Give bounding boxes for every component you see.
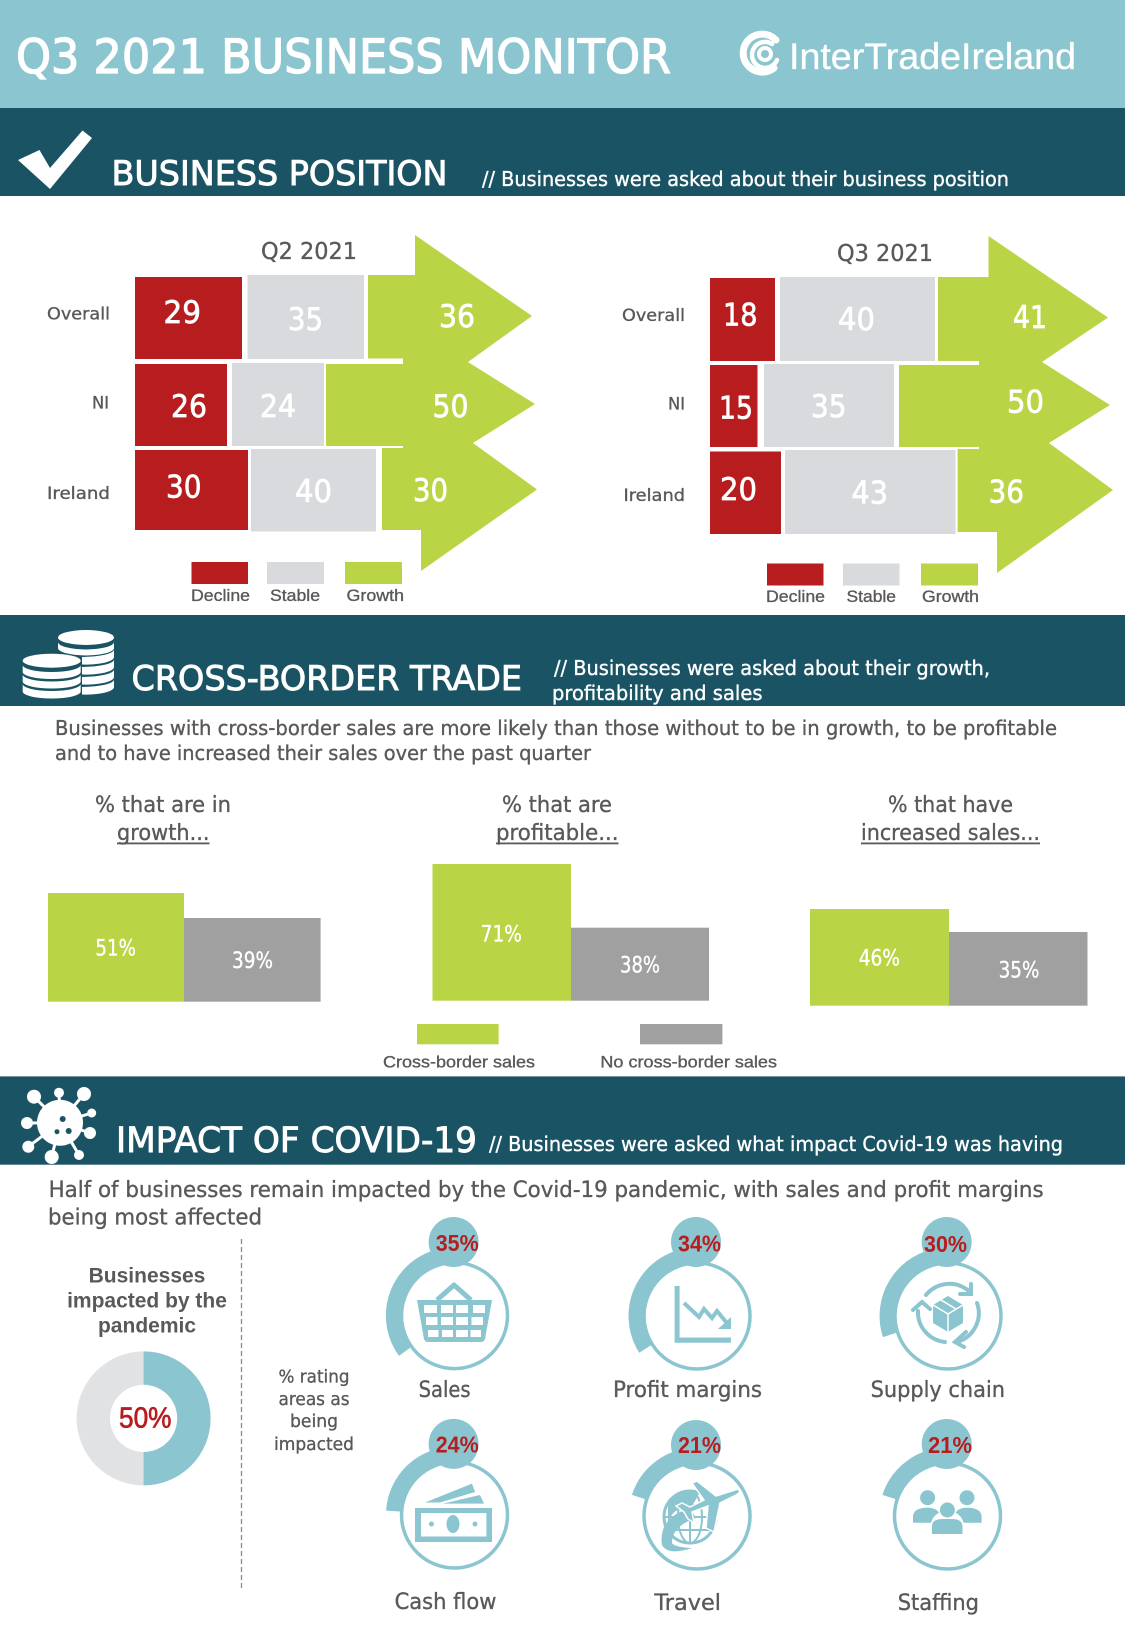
chart: Q3 2021 business position: Overall — [622, 306, 685, 326]
chart: Q2 2021 business position — [47, 235, 537, 571]
donut chart: 50%: 50% — [119, 1403, 172, 1435]
metric: cash flow 24% — [395, 1419, 508, 1615]
bar chart: % in growth: % that are in — [95, 793, 231, 818]
chart: Q2 2021 business position: Ireland — [47, 484, 110, 504]
section band: business position — [0, 108, 1125, 196]
bar chart: % profitable: % that are — [502, 793, 612, 818]
icon: banknotes — [415, 1484, 492, 1542]
chart: Q2 2021 business position: 24 — [260, 389, 296, 425]
donut chart: 50% — [77, 1351, 211, 1485]
header banner — [0, 0, 1125, 108]
heading: business position: BUSINESS POSITION — [112, 154, 448, 194]
text: % rating areas: areas as — [278, 1389, 350, 1410]
title: Q3 2021 BUSINESS MONITOR — [16, 30, 671, 85]
chart: Q2 2021 business position: NI — [92, 394, 109, 414]
text: % rating areas: impacted — [274, 1434, 354, 1455]
icon: falling chart — [675, 1286, 731, 1343]
metric: staffing 21% — [890, 1419, 1000, 1616]
section subtitle: // Businesses were asked about their business position — [482, 167, 1009, 191]
legend: Q2 chart: Decline — [191, 586, 250, 605]
legend: Q2 chart: Stable — [270, 586, 320, 605]
Covid intro text: Half of businesses remain impacted by the Covid-19 pandemic, with sales and profit margins — [49, 1178, 1044, 1203]
bar chart: % profitable — [432, 793, 709, 1001]
icon: check mark — [18, 130, 92, 189]
text: businesses impacted — [67, 1265, 227, 1338]
bar chart: % in growth: 51% — [95, 937, 136, 962]
legend: cross-border sales: No cross-border sales — [600, 1052, 777, 1072]
icon: virus — [21, 1087, 96, 1164]
metric: profit margins 34% — [613, 1217, 762, 1403]
legend: Q3 chart: Growth — [922, 587, 979, 606]
chart: Q3 2021 business position: Ireland — [624, 486, 685, 506]
chart: Q2 2021 business position: 29 — [164, 295, 201, 331]
legend: Q2 chart — [191, 562, 404, 605]
chart: Q2 2021 business position: 50 — [432, 389, 468, 425]
chart: Q3 2021 business position: 20 — [720, 472, 757, 508]
legend: Q3 chart: Decline — [766, 587, 825, 606]
chart: Q2 2021 business position: Overall — [47, 304, 110, 324]
bar chart: % profitable: profitable... — [496, 821, 618, 846]
metric: travel 21% — [640, 1420, 750, 1616]
Covid intro text — [48, 1178, 1044, 1230]
Covid intro text: being most affected — [48, 1205, 262, 1230]
metric: profit margins 34%: Profit margins — [613, 1378, 762, 1403]
chart: Q2 2021 business position: 40 — [295, 474, 332, 510]
section subtitle: // Businesses were asked about their growth, — [554, 656, 990, 680]
chart: Q3 2021 business position: 18 — [723, 297, 758, 333]
metric: supply chain 30%: 30% — [924, 1231, 967, 1257]
bar chart: % in growth — [48, 793, 321, 1002]
bar chart: % increased sales: % that have — [888, 793, 1013, 818]
chart: Q3 2021 business position: NI — [668, 395, 685, 415]
bar chart: % increased sales: 35% — [999, 959, 1040, 984]
logo: InterTradeIreland: InterTradeIreland — [789, 36, 1076, 77]
chart: Q2 2021 business position: 30 — [166, 470, 202, 506]
chart: Q2 2021 business position: 36 — [439, 299, 475, 335]
bar chart: % increased sales — [810, 793, 1088, 1006]
metric: supply chain 30%: Supply chain — [871, 1378, 1005, 1403]
bar chart: % increased sales: increased sales... — [861, 821, 1040, 846]
text: businesses impacted: Businesses — [89, 1265, 205, 1288]
section subtitle — [552, 656, 990, 705]
chart: Q2 2021 business position: 30 — [413, 473, 448, 509]
cross-border intro text: and to have increased their sales over the past quarter — [55, 741, 592, 765]
legend: Q3 chart: Stable — [846, 587, 896, 606]
icon: people — [913, 1490, 982, 1534]
chart: Q3 2021 business position: 43 — [852, 476, 888, 512]
icon: box with cycle arrows — [913, 1284, 979, 1347]
legend: cross-border sales: Cross-border sales — [383, 1052, 535, 1072]
metric: cash flow 24%: 24% — [436, 1431, 479, 1457]
legend: cross-border sales — [383, 1024, 777, 1072]
section subtitle: // Businesses were asked what impact Covid-19 was having — [489, 1132, 1063, 1156]
text: % rating areas — [274, 1367, 354, 1455]
bar chart: % in growth: 39% — [232, 949, 273, 974]
cross-border intro text: Businesses with cross-border sales are more likely than those without to be in growth, to be profitable — [55, 716, 1057, 740]
chart: Q3 2021 business position — [622, 236, 1113, 573]
metric: travel 21%: 21% — [678, 1432, 721, 1458]
heading: cross-border trade: CROSS-BORDER TRADE — [132, 659, 522, 699]
chart: Q2 2021 business position: 35 — [288, 302, 323, 338]
section band: impact of Covid-19 — [0, 1076, 1125, 1165]
divider — [240, 1239, 242, 1589]
chart: Q3 2021 business position: 40 — [838, 302, 875, 338]
bar chart: % increased sales: 46% — [859, 947, 900, 972]
metric: travel 21%: Travel — [653, 1591, 721, 1616]
metric: profit margins 34%: 34% — [678, 1231, 721, 1257]
text: businesses impacted: impacted by the — [67, 1290, 227, 1312]
chart: Q2 2021 business position: Q2 2021 — [261, 239, 357, 265]
chart: Q3 2021 business position: Q3 2021 — [837, 241, 933, 267]
metric: sales 35%: Sales — [419, 1378, 471, 1403]
metric: sales 35%: 35% — [436, 1230, 479, 1256]
chart: Q2 2021 business position: 26 — [171, 389, 207, 425]
cross-border intro text — [55, 716, 1057, 765]
section band: cross-border trade — [0, 615, 1125, 706]
chart: Q3 2021 business position: 35 — [811, 389, 846, 425]
section subtitle: profitability and sales — [552, 681, 762, 705]
icon: shopping basket — [417, 1285, 492, 1342]
chart: Q3 2021 business position: 36 — [988, 474, 1024, 510]
heading: impact of Covid-19: IMPACT OF COVID-19 — [116, 1121, 477, 1161]
bar chart: % profitable: 71% — [481, 923, 522, 948]
legend: Q3 chart — [766, 564, 979, 606]
text: businesses impacted: pandemic — [98, 1314, 196, 1338]
legend: Q2 chart: Growth — [346, 586, 404, 605]
bar chart: % profitable: 38% — [620, 954, 660, 979]
metric: sales 35% — [394, 1217, 508, 1403]
icon: plane and globe — [662, 1481, 740, 1551]
bar chart: % in growth: growth... — [117, 821, 210, 846]
chart: Q3 2021 business position: 41 — [1013, 300, 1047, 336]
icon: coin stacks — [23, 630, 114, 699]
text: % rating areas: being — [290, 1411, 338, 1432]
text: % rating areas: % rating — [278, 1367, 350, 1388]
metric: staffing 21%: 21% — [928, 1432, 972, 1458]
chart: Q3 2021 business position: 15 — [719, 390, 753, 426]
chart: Q3 2021 business position: 50 — [1007, 384, 1044, 420]
metric: supply chain 30% — [871, 1217, 1005, 1403]
metric: cash flow 24%: Cash flow — [395, 1590, 496, 1615]
metric: staffing 21%: Staffing — [898, 1591, 979, 1616]
